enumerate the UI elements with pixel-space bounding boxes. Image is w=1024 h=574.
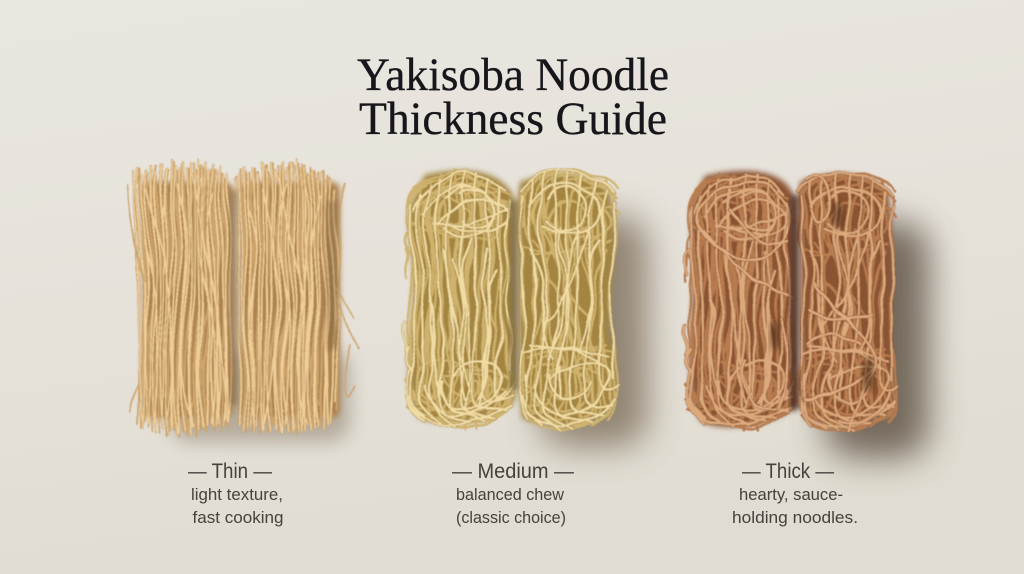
- noodle bundle: medium: [405, 171, 618, 428]
- label: thin: [188, 460, 284, 527]
- cast shadow: thick: [825, 222, 929, 458]
- label: medium: (classic choice): [456, 508, 566, 527]
- noodle bundle: thin: [129, 162, 358, 436]
- label: thin: fast cooking: [192, 508, 284, 527]
- label: thick: holding noodles.: [732, 508, 858, 527]
- panel: thin noodles: [129, 162, 358, 527]
- label: medium: balanced chew: [456, 485, 565, 504]
- cast shadow: thin: [170, 350, 350, 442]
- panel: medium noodles: [405, 171, 648, 527]
- title: Thickness Guide: [359, 93, 667, 145]
- noodle bundle: thick: [684, 171, 898, 430]
- panel: thick noodles: [684, 171, 929, 527]
- label: medium: — Medium —: [452, 460, 574, 483]
- label: medium: [452, 460, 574, 527]
- title: [357, 49, 669, 145]
- cast shadow: medium: [540, 215, 648, 447]
- title: Yakisoba Noodle: [357, 49, 669, 101]
- label: thick: hearty, sauce-: [739, 485, 843, 504]
- label: thick: — Thick —: [742, 460, 834, 483]
- label: thin: light texture,: [191, 485, 283, 504]
- label: thin: — Thin —: [188, 460, 272, 483]
- label: thick: [732, 460, 858, 527]
